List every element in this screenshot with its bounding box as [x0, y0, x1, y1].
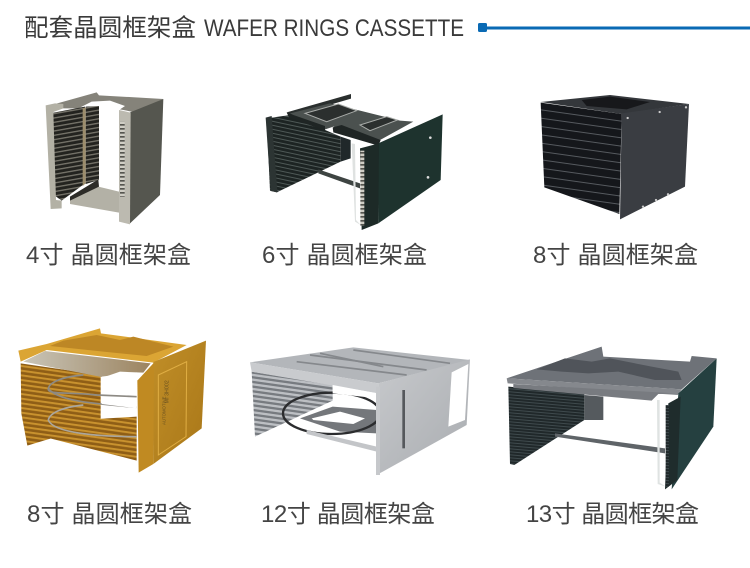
title [24, 14, 464, 42]
product photo: 4 inch cassette [46, 92, 163, 224]
title: WAFER RINGS CASSETTE [204, 15, 464, 42]
product photo: 12 inch cassette [250, 347, 470, 475]
product photo: 8 inch gold cassette: MI 3H002 [164, 380, 170, 403]
label: 6 inch: 6寸 晶圆框架盒 [262, 242, 427, 269]
product photo: 8 inch gold cassette [18, 328, 206, 473]
label: 8 inch gold: 8寸 晶圆框架盒 [27, 501, 192, 528]
title: 配套晶圆框架盒 [24, 14, 196, 42]
product photo: 6 inch cassette [266, 94, 443, 230]
label: 4 inch: 4寸 晶圆框架盒 [26, 242, 191, 269]
label: 12 inch: 12寸 晶圆框架盒 [261, 501, 435, 528]
product photo: 8 inch black cassette [541, 95, 689, 219]
label: 13 inch: 13寸 晶圆框架盒 [526, 501, 699, 528]
product photo: 13 inch cassette [507, 347, 717, 489]
product photo: 8 inch gold cassette: AUTOMOTIVE [162, 396, 167, 425]
title rule with blue marker [478, 23, 750, 32]
label: 8 inch black: 8寸 晶圆框架盒 [533, 242, 698, 269]
